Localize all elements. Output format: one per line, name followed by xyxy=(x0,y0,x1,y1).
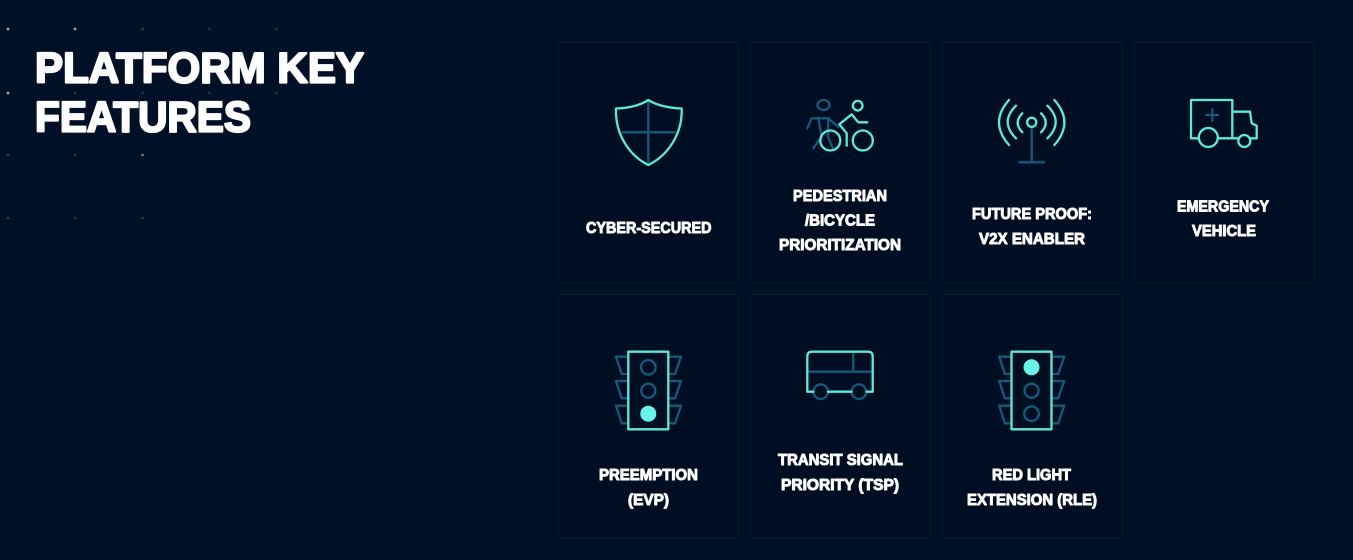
icon: shield xyxy=(616,100,682,165)
label: PRIORITIZATION xyxy=(779,237,901,254)
label: VEHICLE xyxy=(1192,223,1256,240)
title: FEATURES xyxy=(35,94,251,142)
label: PRIORITY (TSP) xyxy=(781,477,899,494)
panel: future proof V2X enabler xyxy=(942,42,1122,283)
title xyxy=(35,44,364,142)
panel: red light extension (RLE) xyxy=(942,294,1122,538)
background dot grid xyxy=(7,28,278,219)
icon: pedestrian and bicycle xyxy=(807,100,873,150)
icon: antenna xyxy=(999,100,1064,162)
icon: traffic light, top lit xyxy=(999,352,1064,429)
panel: preemption (EVP) xyxy=(558,294,738,538)
label: V2X ENABLER xyxy=(979,231,1085,248)
panel: transit signal priority (TSP) xyxy=(750,294,930,538)
label: PEDESTRIAN xyxy=(793,188,887,205)
label xyxy=(778,452,903,494)
label xyxy=(779,188,901,254)
title: PLATFORM KEY xyxy=(35,44,364,92)
label xyxy=(1177,198,1270,240)
label: CYBER-SECURED xyxy=(586,220,712,237)
label xyxy=(599,467,698,509)
label xyxy=(967,467,1097,509)
icon: traffic light, bottom lit xyxy=(616,352,681,429)
label: RED LIGHT xyxy=(992,467,1071,484)
label: TRANSIT SIGNAL xyxy=(778,452,903,469)
label: FUTURE PROOF: xyxy=(972,206,1092,223)
label: (EVP) xyxy=(628,492,669,509)
label: PREEMPTION xyxy=(599,467,698,484)
panel: pedestrian / bicycle prioritization xyxy=(750,42,930,283)
icon: bus xyxy=(807,352,873,399)
label: EMERGENCY xyxy=(1177,198,1270,216)
label: /BICYCLE xyxy=(805,212,875,230)
label: EXTENSION (RLE) xyxy=(967,492,1097,509)
panel: emergency vehicle xyxy=(1134,42,1314,283)
label xyxy=(972,206,1092,248)
panel: cyber-secured xyxy=(558,42,738,283)
icon: ambulance xyxy=(1191,100,1257,147)
